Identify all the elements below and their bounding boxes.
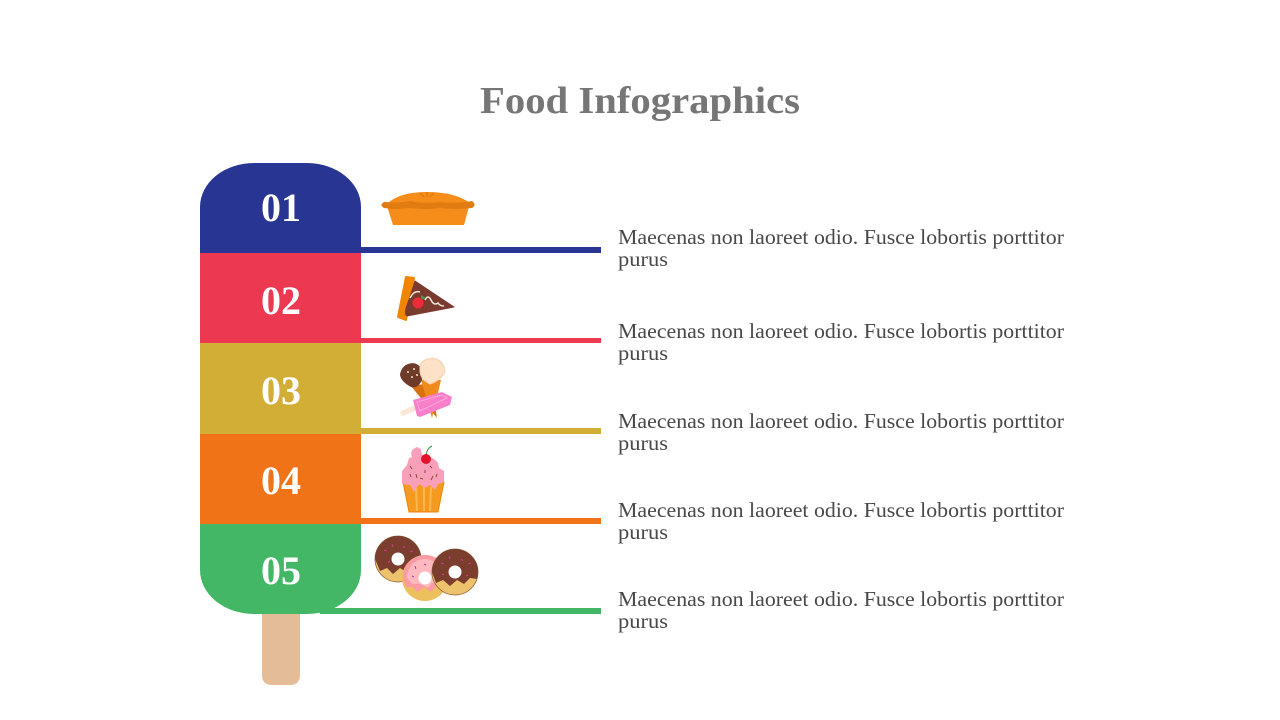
row 5 connector bar: [320, 608, 601, 614]
popsicle segment 05: 05: [261, 548, 301, 593]
icon: donuts: [375, 536, 478, 601]
description 3: Maecenas non laoreet odio. Fusce lobortis porttitor: [618, 409, 1064, 433]
popsicle segment 01: [200, 163, 361, 253]
description 2: purus: [618, 341, 668, 365]
row 2 connector bar: [361, 338, 601, 343]
row 3 connector bar: [361, 428, 601, 434]
description 1: Maecenas non laoreet odio. Fusce lobortis porttitor: [618, 225, 1064, 249]
description 1: [618, 225, 1064, 271]
description 1: purus: [618, 247, 668, 271]
description 5: [618, 587, 1064, 633]
description 3: purus: [618, 431, 668, 455]
icon: pie: [382, 192, 474, 225]
description 4: Maecenas non laoreet odio. Fusce lobortis porttitor: [618, 498, 1064, 522]
popsicle segment 03: [200, 343, 361, 434]
popsicle segment 04: [200, 434, 361, 524]
popsicle stick: [262, 612, 300, 685]
popsicle segment 03: 03: [261, 368, 301, 413]
icon: ice creams: [400, 359, 452, 418]
description 4: purus: [618, 520, 668, 544]
popsicle segment 01: 01: [261, 185, 301, 230]
description 5: purus: [618, 609, 668, 633]
description 5: Maecenas non laoreet odio. Fusce lobortis porttitor: [618, 587, 1064, 611]
description 2: [618, 319, 1064, 365]
description 3: [618, 409, 1064, 455]
popsicle segment 02: 02: [261, 278, 301, 323]
row 4 connector bar: [361, 518, 601, 524]
icon: pizza slice: [398, 277, 454, 320]
popsicle segment 04: 04: [261, 458, 301, 503]
description 2: Maecenas non laoreet odio. Fusce lobortis porttitor: [618, 319, 1064, 343]
description 4: [618, 498, 1064, 544]
popsicle segment 02: [200, 253, 361, 343]
popsicle segment 05: [200, 524, 361, 614]
title: Food Infographics: [480, 80, 800, 122]
icon: cupcake: [402, 446, 444, 512]
row 1 connector bar: [361, 247, 601, 253]
